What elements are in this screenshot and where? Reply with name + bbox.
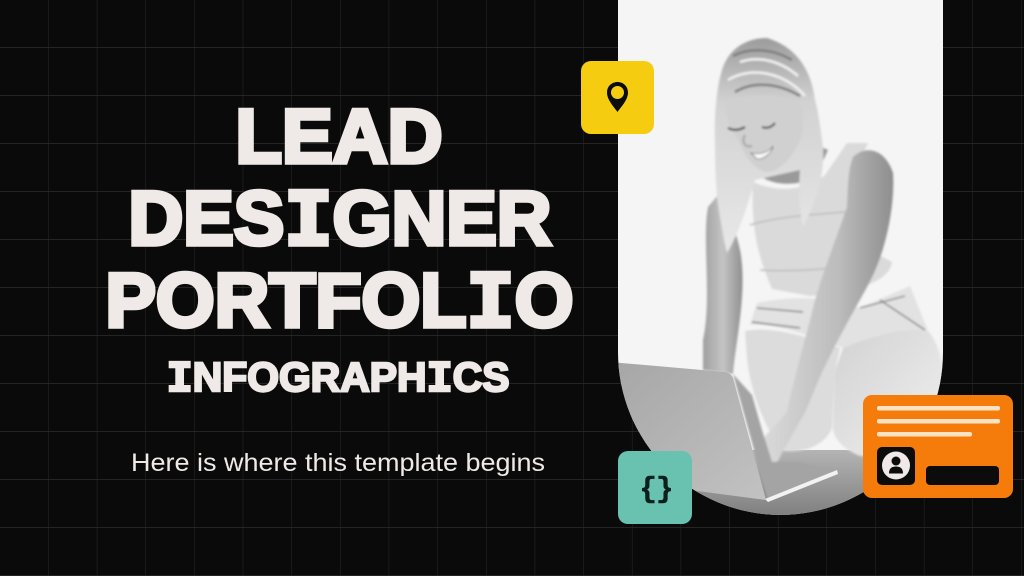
text lines <box>877 406 1000 436</box>
left arm <box>703 195 743 374</box>
button <box>926 466 999 485</box>
mouth <box>751 146 773 159</box>
right arm <box>757 150 893 472</box>
laptop base <box>732 374 810 498</box>
left thigh <box>745 330 840 451</box>
title: PORTFOLIO <box>106 258 574 352</box>
title: LEAD <box>236 94 442 180</box>
avatar <box>877 447 915 485</box>
right thigh <box>833 329 942 456</box>
icon: location pin card <box>581 61 654 134</box>
laptop <box>610 362 838 502</box>
laptop lid <box>610 362 766 500</box>
icon: pin <box>607 82 628 112</box>
hair highlights <box>728 59 805 96</box>
subtitle: infographics: INFOGRAPHICS <box>166 354 510 405</box>
tagline: Here is where this template begins <box>131 449 545 477</box>
denim shorts <box>750 286 928 348</box>
profile card <box>863 395 1013 498</box>
icon: code braces card <box>618 451 692 524</box>
eyes <box>728 123 775 130</box>
neck <box>764 147 829 185</box>
icon: code braces card: {} <box>640 473 673 506</box>
top <box>753 143 892 296</box>
nose shadow <box>743 135 752 146</box>
floor <box>650 450 864 515</box>
photo: woman with laptop <box>610 0 943 520</box>
hair back <box>715 38 823 253</box>
title <box>106 94 574 352</box>
face <box>745 146 793 171</box>
title: DESIGNER <box>128 176 552 270</box>
